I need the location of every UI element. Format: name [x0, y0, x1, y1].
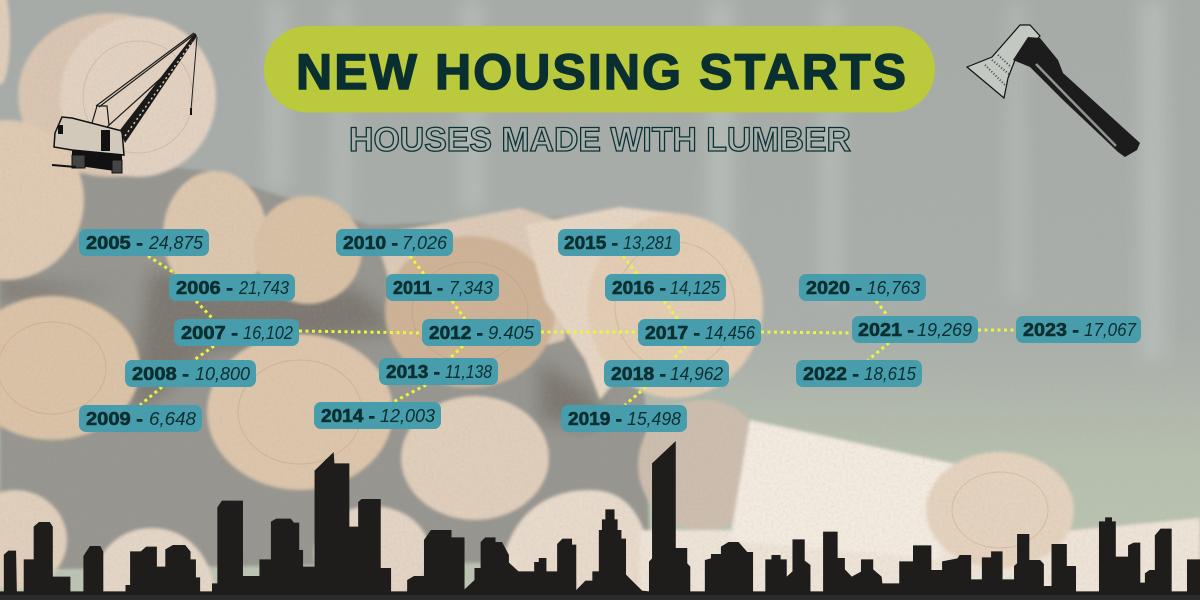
label: 2019: [561, 405, 687, 432]
icon: axe: [967, 25, 1140, 157]
label: 2005: 2005 -: [86, 233, 143, 253]
label: 2021: [852, 316, 978, 343]
label: 2016: 14,125: [670, 278, 721, 298]
label: 2011: 7,343: [449, 278, 493, 298]
label: 2021: 2021 -: [858, 320, 914, 340]
label: 2022: [796, 360, 922, 387]
label: 2010: 7,026: [402, 233, 448, 253]
label: 2007: 2007 -: [181, 323, 238, 343]
label: 2023: [1016, 316, 1141, 343]
label: 2008: [125, 360, 256, 387]
label: 2019: 15,498: [627, 409, 681, 429]
label: 2015: 13,281: [623, 233, 673, 253]
label: 2020: 2020 -: [806, 278, 862, 298]
skyline silhouette: [0, 441, 1200, 600]
label: 2017: [638, 319, 761, 346]
label: 2011: [386, 274, 499, 301]
label: 2018: 2018 -: [611, 364, 666, 384]
label: 2006: 2006 -: [176, 278, 233, 298]
label: 2015: [558, 229, 680, 256]
label: 2005: 24,875: [148, 233, 204, 253]
label: 2008: 10,800: [195, 364, 250, 384]
connector lines: [140, 256, 1016, 405]
label: 2014: [314, 402, 441, 429]
label: 2014: 2014 -: [321, 406, 375, 426]
label: 2009: [79, 405, 202, 432]
label: 2013: 11,138: [445, 362, 492, 382]
label: 2018: 14,962: [670, 364, 723, 384]
label: 2007: [174, 319, 299, 346]
label: 2011: 2011 -: [393, 278, 443, 298]
title pill: NEW HOUSING STARTS: [296, 44, 906, 100]
title pill: [264, 26, 935, 112]
icon: crane: [52, 33, 197, 173]
label: 2023: 2023 -: [1023, 320, 1079, 340]
label: 2009: 2009 -: [86, 409, 143, 429]
label: 2012: 2012 -: [429, 323, 483, 343]
label: 2019: 2019 -: [568, 409, 622, 429]
label: 2012: [422, 319, 541, 346]
label: 2015: 2015 -: [564, 233, 618, 253]
label: 2023: 17,067: [1084, 320, 1137, 340]
label: 2017: 14,456: [705, 323, 756, 343]
label: 2009: 6,648: [149, 409, 196, 429]
label: 2013: 2013 -: [386, 362, 440, 382]
label: 2010: 2010 -: [343, 233, 398, 253]
label: 2007: 16,102: [243, 323, 293, 343]
label: 2008: 2008 -: [132, 364, 189, 384]
label: 2014: 12,003: [380, 406, 435, 426]
label: 2020: [799, 274, 926, 301]
label: 2013: [379, 358, 498, 385]
label: 2012: 9.405: [488, 323, 535, 343]
label: 2018: [604, 360, 729, 387]
label: 2006: [169, 274, 295, 301]
label: 2010: [336, 229, 453, 256]
label: 2006: 21,743: [238, 278, 289, 298]
label: 2022: 18,615: [864, 364, 917, 384]
subtitle: HOUSES MADE WITH LUMBER: [349, 121, 851, 159]
label: 2016: 2016 -: [612, 278, 666, 298]
label: 2022: 2022 -: [803, 364, 859, 384]
label: 2016: [605, 274, 726, 301]
label: 2017: 2017 -: [645, 323, 700, 343]
label: 2021: 19,269: [917, 320, 972, 340]
label: 2020: 16,763: [867, 278, 920, 298]
label: 2005: [79, 229, 209, 256]
